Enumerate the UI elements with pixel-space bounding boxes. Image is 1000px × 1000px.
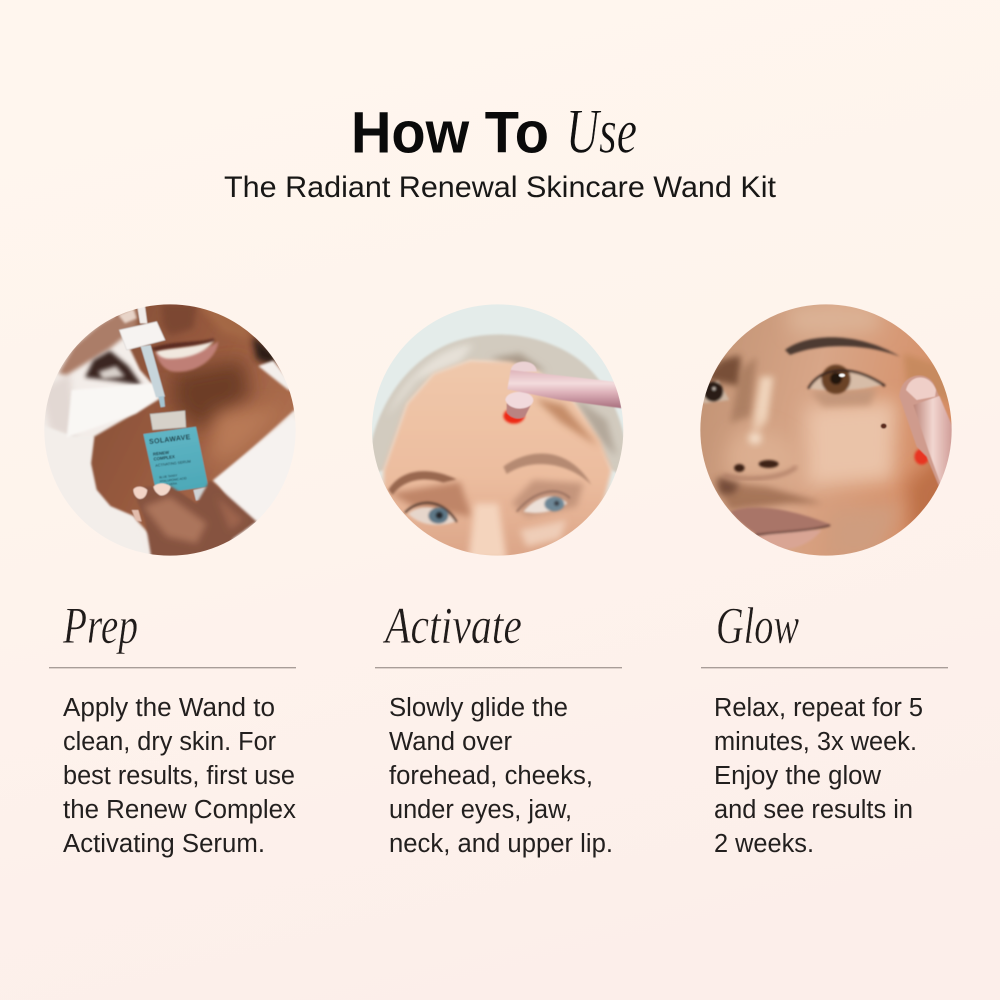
text: prep instructions: Apply the Wand to [63,694,275,722]
column: prep [49,598,296,858]
cheek light [807,400,897,487]
nostrils [734,460,779,472]
wand [899,376,957,497]
bottle neck [150,411,186,430]
bottle label: RENEW [153,450,170,457]
wand [505,362,622,419]
left eye socket [390,482,472,517]
text: activate instructions: forehead, cheeks, [389,762,593,790]
eye glint [839,374,845,377]
text: activate instructions [389,694,613,858]
red glow [914,449,929,465]
right eye [517,491,570,513]
upper cheek shadow left [700,355,742,387]
text: prep instructions: best results, first use [63,762,295,790]
right brow [503,453,592,485]
text: glow instructions: Relax, repeat for 5 [714,694,923,722]
photo: activate, wand on forehead [372,304,624,556]
text: prep instructions: Activating Serum. [63,830,265,858]
bottle label: BLUE TANSY [159,473,178,479]
bottle label: ALOE VERA [160,481,177,487]
nose [727,428,798,478]
under eye highlight [520,520,567,547]
heading: activate: Activate [383,598,522,655]
text: activate instructions: Wand over [389,728,513,756]
left eye [405,503,457,525]
hand near face [58,307,138,375]
teeth [156,340,214,359]
eyebrow [785,337,900,357]
lower left shadow [713,480,823,510]
robe shadow left [46,376,72,434]
hair [367,334,630,480]
holding hand [133,480,257,560]
nose [162,303,197,335]
column: activate [375,598,622,858]
bottle label: SOLAWAVE [149,434,191,446]
face tone [202,309,244,334]
heading: prep: Prep [62,598,138,655]
text: glow instructions: Enjoy the glow [714,762,882,790]
title [351,96,637,166]
nose side shadow [730,357,757,423]
text: glow instructions: and see results in [714,796,913,824]
dropper [137,306,147,323]
white robe left [50,429,135,520]
nose bridge highlight [468,503,507,560]
eye [808,365,885,394]
collar [67,383,157,437]
white robe right [212,418,294,492]
nose tip highlight [748,432,762,444]
lips [155,342,218,372]
subtitle: The Radiant Renewal Skincare Wand Kit [224,171,777,204]
text: prep instructions: the Renew Complex [63,796,296,824]
chin [844,504,903,552]
bottle label: HYALURONIC ACID [159,476,188,483]
hair left [85,351,142,385]
photo: prep, applying serum [44,304,295,556]
text: prep instructions [63,694,296,858]
left eye [700,381,729,403]
neck shadow [173,360,250,430]
text: activate instructions: under eyes, jaw, [389,796,572,824]
hair right [252,335,278,365]
red glow [503,408,525,424]
title: Use [566,96,637,166]
under eye shadow [810,388,877,407]
bottle label: ACTIVATING SERUM [155,460,191,468]
chest light [210,407,283,467]
text: activate instructions: neck, and upper lip. [389,830,613,858]
forehead light [787,307,880,333]
bottle label [143,427,210,501]
text: glow instructions: minutes, 3x week. [714,728,917,756]
neck, chest and arm skin [90,304,294,534]
upper right warm [903,354,948,400]
text: glow instructions [714,694,923,858]
column: glow [701,598,948,858]
nose highlight [752,377,773,437]
lips [730,507,832,549]
heading: glow: Glow [716,598,799,655]
text: glow instructions: 2 weeks. [714,830,814,858]
right eye socket [512,480,583,517]
forehead shadow under wand [535,398,598,447]
photo: glow, wand on cheek [700,304,952,556]
mole [881,423,887,429]
nose wing shadow [723,467,797,478]
bottle label: COMPLEX [153,454,175,462]
face skin [383,360,612,570]
left brow [388,471,457,495]
title: How To [351,100,549,166]
text: prep instructions: clean, dry skin. For [63,728,277,756]
warm right edge [900,462,938,527]
text: activate instructions: Slowly glide the [389,694,568,722]
